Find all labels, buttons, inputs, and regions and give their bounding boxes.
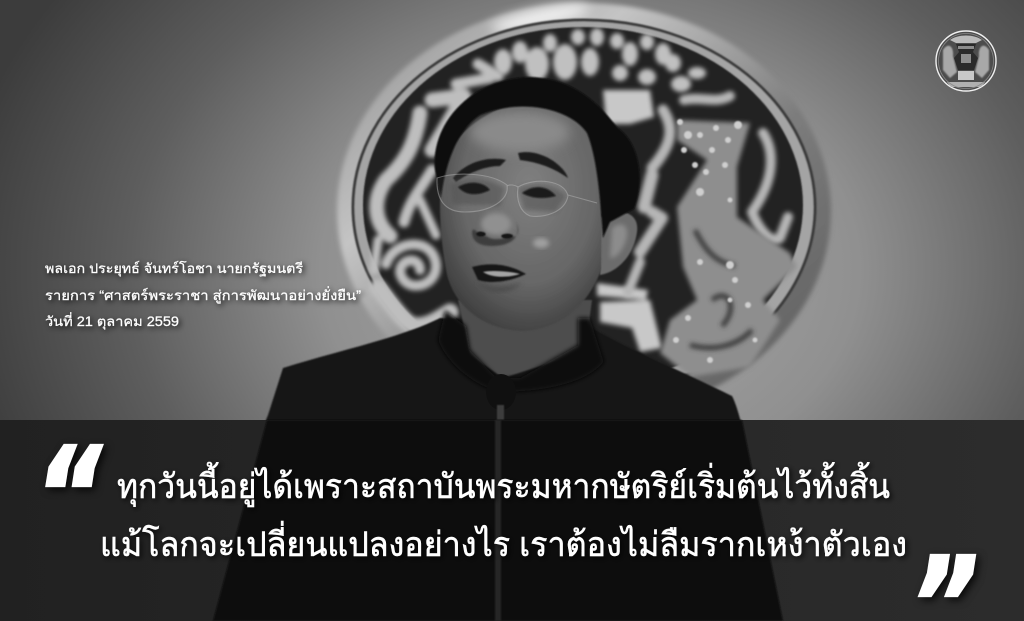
- mouth: [472, 264, 526, 282]
- government seal logo: [936, 31, 996, 91]
- emblem central vessel: [597, 90, 662, 352]
- ear: [600, 212, 637, 275]
- collar: [438, 310, 604, 392]
- cheek highlight: [533, 238, 549, 248]
- jacket body: [212, 318, 782, 621]
- caption text: วันที่ 21 ตุลาคม 2559: [45, 312, 179, 330]
- quote text: แม้โลกจะเปลี่ยนแปลงอย่างไร เราต้องไม่ลืมรากเหง้าตัวเอง: [100, 521, 907, 564]
- person: [212, 77, 782, 621]
- lion dark details: [690, 230, 752, 348]
- microphone stem through band: [495, 420, 501, 621]
- neck: [458, 300, 592, 378]
- eyebrows: [453, 152, 568, 182]
- lip shadow: [476, 282, 522, 292]
- caption text: รายการ “ศาสตร์พระราชา สู่การพัฒนาอย่างยั่งยืน”: [45, 286, 361, 304]
- nose: [472, 213, 518, 246]
- emblem top petals: [494, 28, 706, 92]
- caption text: พลเอก ประยุทธ์ จันทร์โอชา นายกรัฐมนตรี: [45, 260, 303, 277]
- eyes: [458, 183, 556, 198]
- lion highlights: [673, 119, 758, 363]
- quote text: [100, 462, 907, 564]
- jacket seen through band: [213, 420, 783, 621]
- dark quote band: [0, 420, 1024, 621]
- hair: [435, 77, 640, 238]
- eye sockets: [450, 179, 566, 212]
- quote text: ทุกวันนี้อยู่ได้เพราะสถาบันพระมหากษัตริย์เริ่มต้นไว้ทั้งสิ้น: [117, 462, 890, 507]
- caption text: [45, 260, 361, 330]
- emblem right strokes: [628, 96, 788, 292]
- emblem left ornaments: [374, 64, 498, 326]
- emblem seal on the wall: [337, 0, 831, 419]
- emblem lion: [660, 120, 797, 377]
- forehead highlight: [470, 112, 570, 152]
- glasses: [437, 174, 597, 216]
- face: [440, 100, 602, 331]
- microphone: [486, 374, 516, 420]
